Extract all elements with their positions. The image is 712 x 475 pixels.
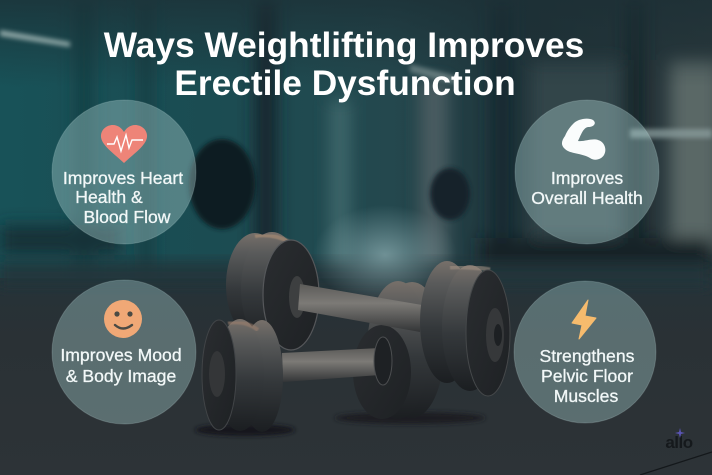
badge: pelvic floor	[514, 281, 656, 423]
upper dumbbell left plates	[226, 232, 319, 350]
icon: heart with pulse	[101, 125, 147, 163]
label: Improves Heart	[63, 168, 183, 188]
label: Improves	[551, 168, 623, 188]
icon: flexed arm	[562, 119, 605, 160]
lower dumbbell collar	[374, 337, 392, 385]
label: Strengthens	[540, 346, 635, 366]
badge: mood and body image	[52, 280, 196, 424]
badge: overall health	[515, 100, 659, 244]
label: Blood Flow	[83, 207, 171, 227]
dumbbells	[195, 232, 510, 436]
icon: smiley	[104, 300, 142, 338]
badge: heart health	[52, 100, 196, 244]
label: Overall Health	[531, 188, 643, 208]
floor shadows	[195, 424, 295, 436]
label: Pelvic Floor	[541, 366, 633, 386]
icon: lightning bolt	[572, 300, 596, 339]
rear plates of lower dumbbell	[353, 281, 444, 419]
label: Muscles	[554, 386, 618, 406]
upper dumbbell right plates	[420, 261, 510, 396]
lower dumbbell left plates	[202, 319, 283, 432]
upper dumbbell bar	[298, 284, 422, 332]
lower dumbbell bar	[282, 348, 380, 382]
label: Health &	[75, 187, 143, 207]
logo: allo: allo	[665, 433, 693, 452]
label: & Body Image	[66, 366, 176, 386]
title: Ways Weightlifting Improves	[104, 26, 584, 65]
label: Improves Mood	[60, 345, 182, 365]
title: Erectile Dysfunction	[174, 64, 516, 103]
